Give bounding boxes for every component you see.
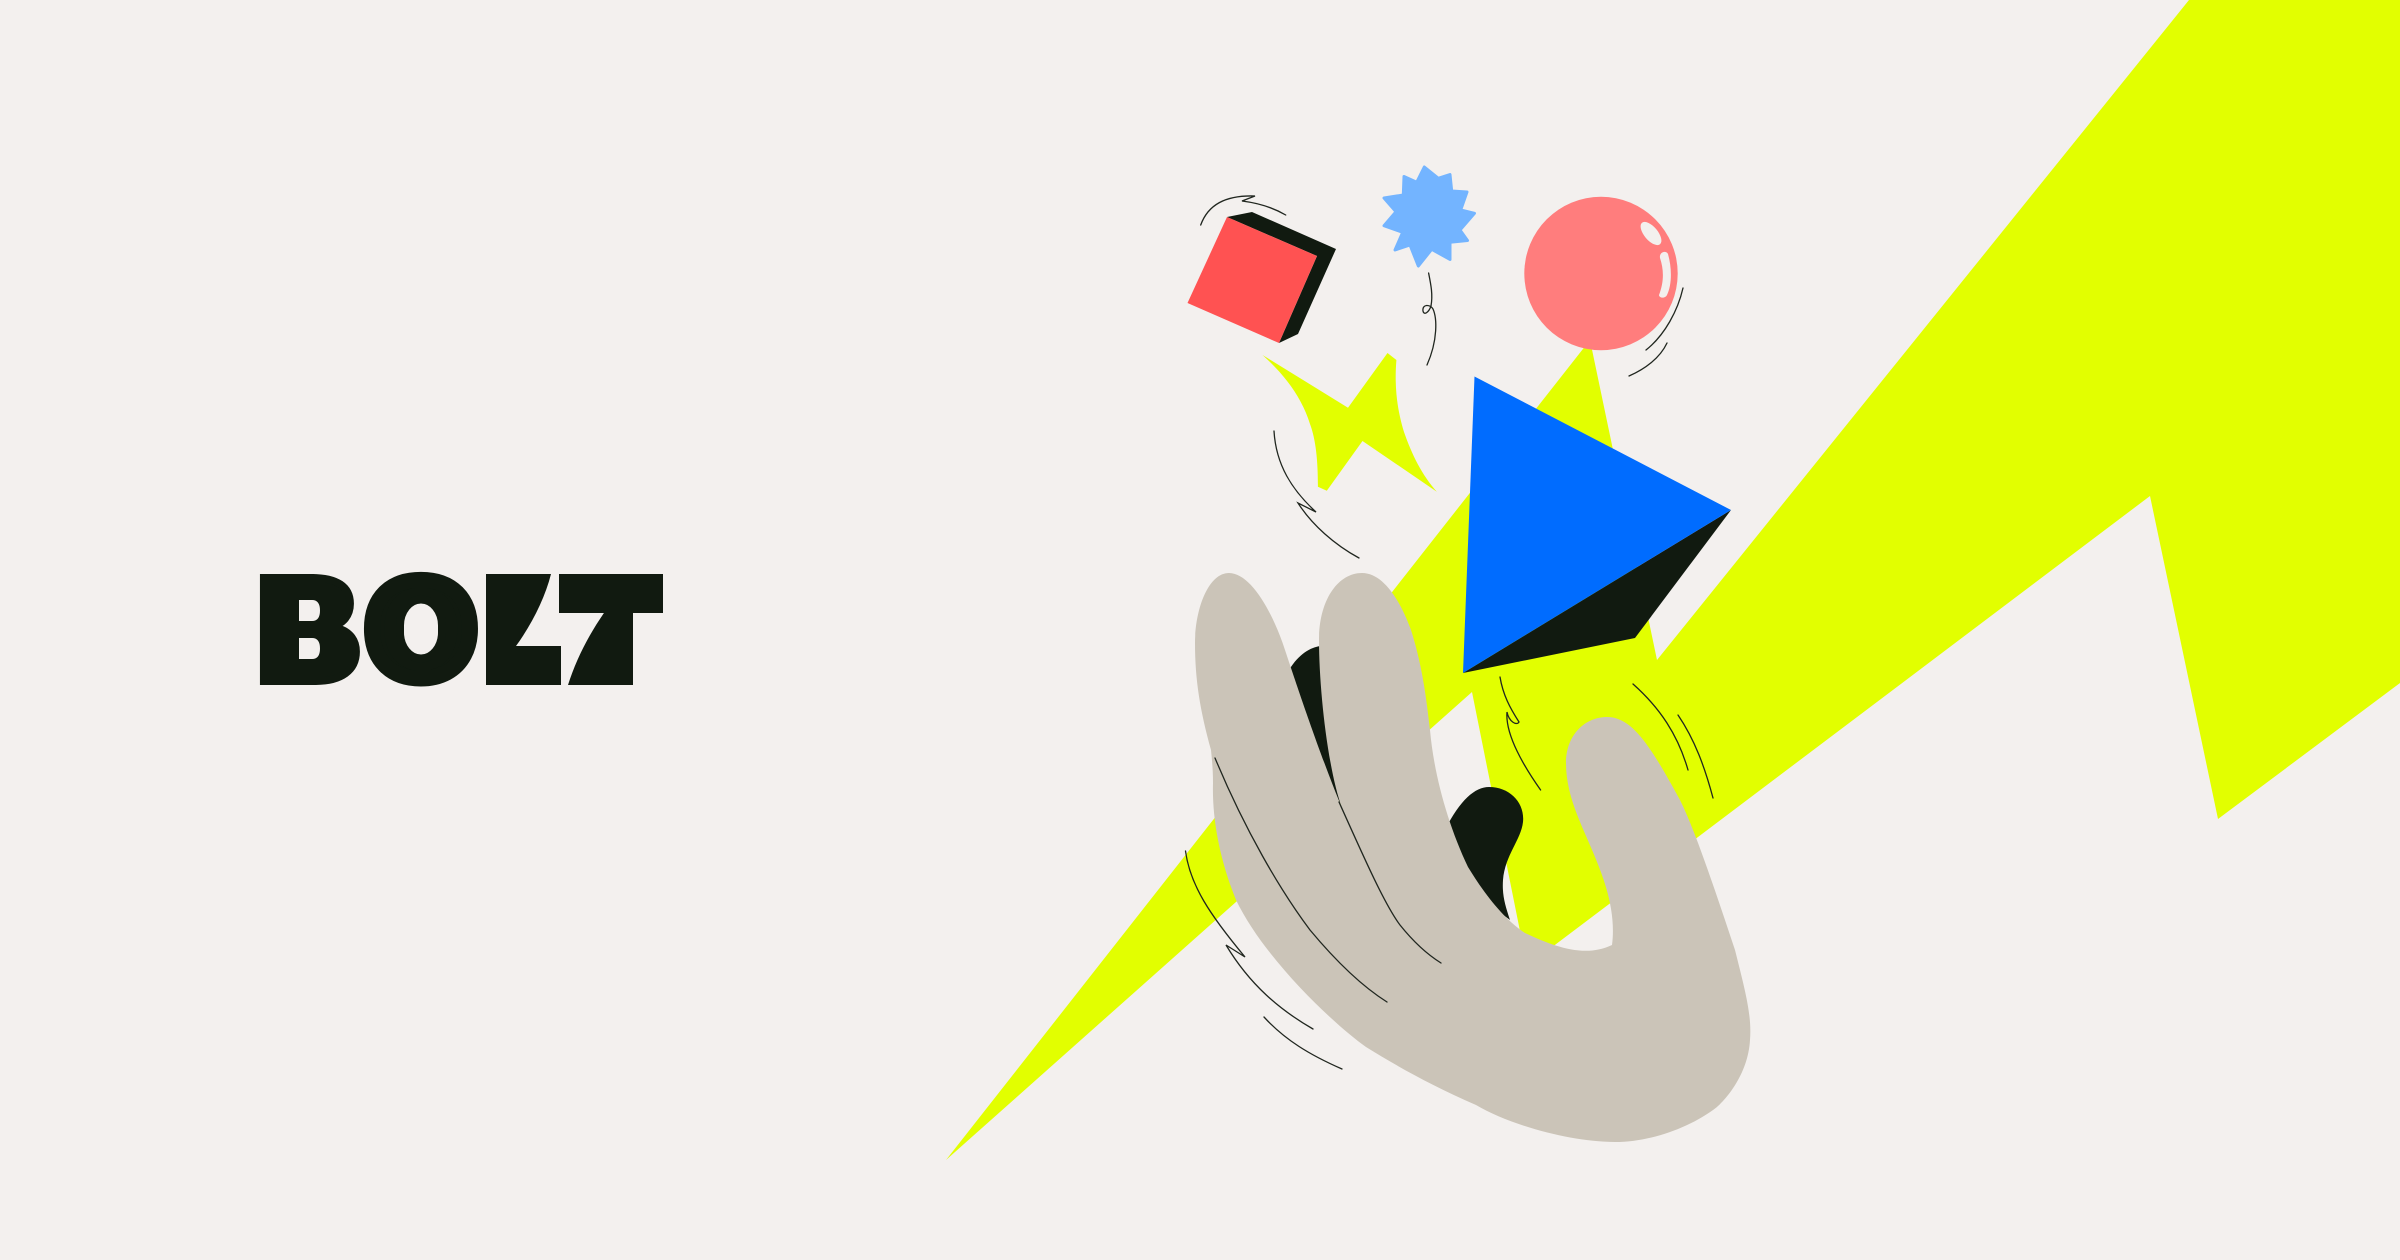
motion line: hand left [1186, 851, 1313, 1029]
motion line: small bolt [1274, 431, 1359, 558]
red cube [1188, 212, 1336, 343]
icon: dark teardrop between fingers [1288, 646, 1345, 812]
icon: dark teardrop near thumb [1445, 787, 1523, 920]
bolt cut of T: wedge [559, 574, 663, 685]
icon: light blue star [1384, 167, 1474, 266]
motion line: hand lower [1264, 1017, 1342, 1069]
pink ball [1524, 197, 1678, 350]
ball highlight upper [1637, 218, 1665, 249]
letter B: B [254, 545, 363, 713]
bolt cut of L [486, 574, 561, 685]
finger crease line one [1215, 758, 1387, 1002]
ball highlight lower [1659, 252, 1671, 298]
body weight of B [260, 574, 338, 685]
small lime bolt [1262, 353, 1437, 492]
letter T: T [569, 558, 653, 702]
motion line: star [1423, 273, 1436, 365]
counter ring of O [400, 600, 442, 658]
finger crease line two [1339, 802, 1441, 963]
blue triangle with dark side [1463, 376, 1731, 673]
triangle blue face [1463, 376, 1731, 673]
large lime lightning bolt [946, 0, 2400, 1160]
triangle dark side [1463, 510, 1731, 673]
ball body [1524, 197, 1678, 350]
bolt cut of T: background notch [580, 613, 604, 662]
counters of B [299, 600, 320, 659]
cube dark side [1227, 212, 1336, 343]
motion line: right of triangle one [1633, 684, 1688, 770]
hand [1195, 573, 1750, 1142]
motion line: ball outer [1646, 288, 1683, 350]
BOLT logo [254, 545, 663, 713]
letter L: L [484, 551, 557, 708]
cube red face [1188, 217, 1317, 343]
motion line: ball inner [1629, 343, 1667, 376]
letter O: O [366, 551, 476, 707]
motion line: right of triangle two [1678, 715, 1713, 798]
motion line: below triangle [1500, 677, 1541, 790]
motion line: cube [1201, 196, 1286, 225]
